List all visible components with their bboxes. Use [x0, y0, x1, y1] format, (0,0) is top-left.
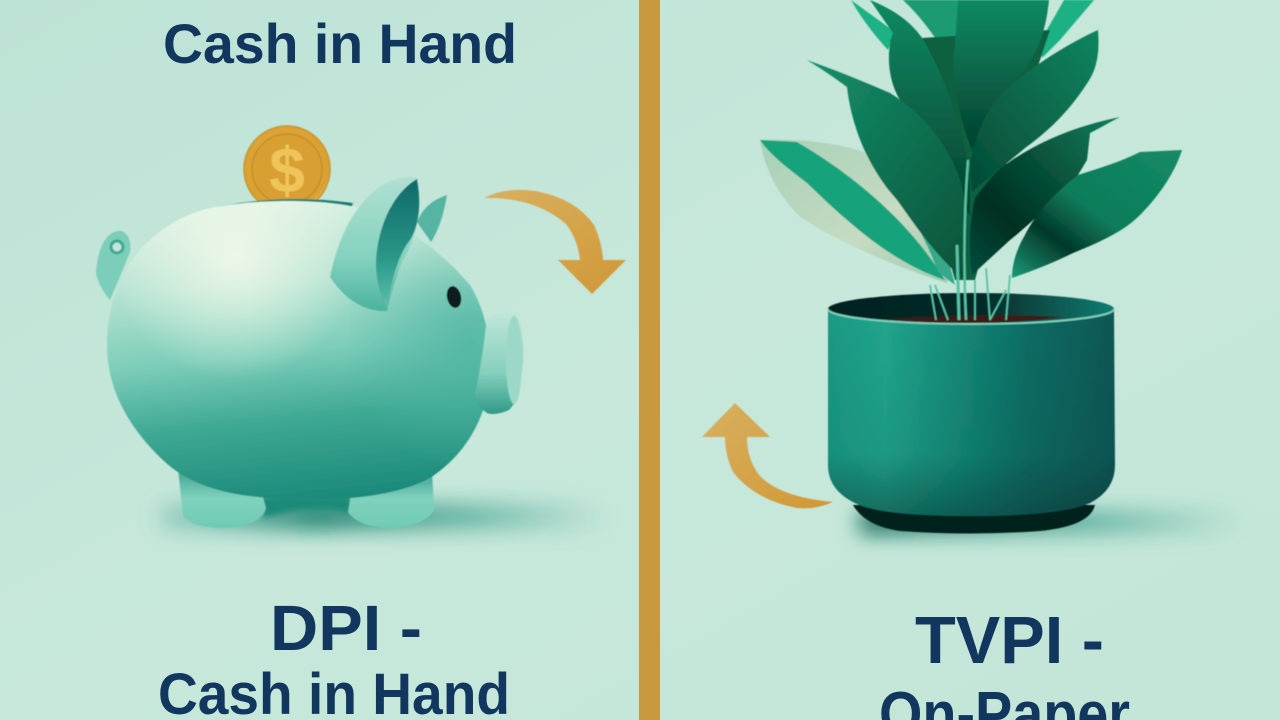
pot shadow — [860, 510, 1245, 534]
pot body — [828, 309, 1115, 516]
soil — [880, 315, 1065, 323]
leaf: upper right — [970, 30, 1099, 192]
leaf: upper left — [870, 0, 970, 215]
leaf: far left green band — [760, 140, 945, 280]
snout face — [506, 316, 522, 404]
coin slot — [212, 199, 353, 213]
leaf: right mid — [970, 117, 1120, 275]
stems — [930, 160, 1010, 320]
eye — [445, 285, 463, 309]
snout — [475, 312, 523, 414]
pot base — [853, 505, 1095, 534]
coin — [244, 126, 330, 212]
heading: DPI: DPI - — [270, 592, 422, 664]
big ear — [330, 177, 419, 311]
leaf: far right — [1012, 150, 1182, 278]
body highlight — [107, 201, 490, 500]
arrow: up from pot — [702, 403, 833, 508]
front leg — [348, 470, 434, 528]
potted plant — [760, 0, 1182, 534]
leaf: mid left — [807, 60, 968, 282]
piggy bank illustration — [96, 126, 523, 528]
panel: TVPI on-paper — [702, 0, 1245, 720]
leaf: top light left — [851, 0, 895, 50]
panel: DPI cash in hand — [96, 12, 626, 720]
heading: TVPI: TVPI - — [915, 603, 1104, 678]
leaf: far left inner strip — [888, 175, 955, 285]
under-body shadow — [258, 495, 352, 518]
far ear — [417, 195, 447, 242]
pot rim highlight — [828, 309, 1114, 324]
pig body — [107, 201, 490, 500]
leaf: top center small — [903, 0, 960, 70]
back leg — [178, 468, 266, 528]
leaf: top centre — [954, 0, 1049, 150]
inner ear — [376, 179, 419, 308]
head tint — [340, 207, 490, 498]
coin: $ — [269, 134, 305, 206]
pot bottom shading — [828, 309, 1115, 516]
pig ground shadow — [160, 503, 610, 530]
divider bar — [639, 0, 660, 720]
leaf: far left pale — [760, 140, 955, 283]
arrow: down to divider — [484, 190, 626, 294]
center backing — [890, 30, 1050, 280]
top heading: Cash in Hand: Cash in Hand — [163, 12, 517, 75]
pot interior — [828, 293, 1114, 325]
leaf: top light right — [1033, 0, 1094, 57]
tail — [96, 231, 130, 300]
